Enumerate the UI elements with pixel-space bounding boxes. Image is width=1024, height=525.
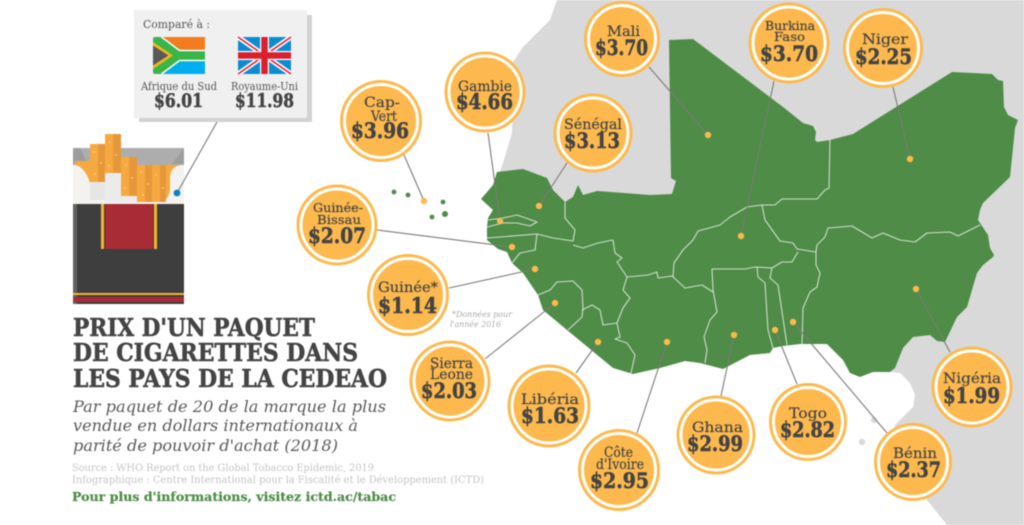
- title: LES PAYS DE LA CEDEAO: [73, 364, 387, 393]
- callout: Gambie: $4.66: [456, 89, 513, 114]
- callout: Niger: [844, 10, 922, 162]
- callout: Libéria: $1.63: [521, 403, 579, 428]
- subtitle: vendue en dollars internationaux à: [73, 417, 358, 435]
- callout: Nigéria: Nigéria: [943, 371, 1001, 387]
- callout: Ghana: $2.99: [687, 431, 743, 456]
- callout: Burkina Faso: $3.70: [760, 41, 818, 66]
- title: DE CIGARETTES DANS: [73, 338, 358, 367]
- footnote: [450, 309, 513, 330]
- callout: Guinée: [368, 256, 538, 334]
- callout: Guinée-Bissau: $2.07: [308, 223, 366, 248]
- callout: Mali: Mali: [607, 24, 641, 40]
- callout: Sénégal: $3.13: [564, 128, 620, 153]
- callout: Sierra Leone: [411, 300, 558, 420]
- callout: Cap-Vert: $3.96: [351, 118, 409, 143]
- callout: Guinée-Bissau: [298, 186, 515, 264]
- South Africa price: Afrique du Sud: [140, 80, 217, 93]
- callout: Cap-Vert: [342, 82, 427, 204]
- UK price: Royaume-Uni: [231, 80, 298, 93]
- callout: Sénégal: Sénégal: [564, 117, 622, 133]
- callout: Bénin: Bénin: [893, 446, 937, 462]
- cigarette pack illustration: [73, 134, 184, 304]
- callout: Burkina Faso: Burkina: [765, 19, 815, 33]
- icon: South Africa flag: [153, 37, 205, 74]
- subtitle: Par paquet de 20 de la marque la plus: [72, 398, 386, 416]
- footnote: l'année 2016: [450, 319, 502, 330]
- callout: Sierra Leone: Leone: [430, 367, 473, 383]
- title: PRIX D'UN PAQUET: [73, 313, 315, 342]
- callout: Côte d'Ivoire: Côte: [604, 445, 633, 461]
- callout: Cap-Vert: Vert: [370, 109, 398, 125]
- footnote: *Données pour: [452, 309, 513, 320]
- islands of Cape Verde: [392, 190, 448, 219]
- callout: Nigéria: [913, 286, 1011, 426]
- callout: Togo: $2.82: [780, 417, 835, 442]
- map: surrounding grey land: [497, 0, 1024, 525]
- UK price: [231, 80, 298, 112]
- source credits: Infographique : Centre International pour la Fiscalité et le Développement (ICTD): [72, 475, 484, 486]
- islands in the Gulf of Guinea: [859, 417, 877, 445]
- South Africa price: $6.01: [154, 90, 203, 112]
- callout: Sierra Leone: $2.03: [421, 378, 477, 403]
- callout: Mali: $3.70: [595, 35, 648, 60]
- callout: Guinée: $1.14: [378, 293, 437, 318]
- icon: UK flag: [238, 37, 291, 74]
- callout: Ghana: Ghana: [692, 420, 743, 436]
- callout: Côte d'Ivoire: $2.95: [590, 468, 649, 493]
- callout: Mali: [586, 2, 711, 138]
- title: [73, 313, 387, 393]
- more information link: Pour plus d'informations, visitez ictd.ac/tabac: [72, 490, 396, 504]
- source credits: [72, 463, 484, 486]
- callout: Gambie: Gambie: [458, 79, 512, 95]
- panel heading: Comparé à :: [143, 18, 210, 31]
- callout: Guinée-Bissau: Bissau: [317, 212, 361, 227]
- callout: Libéria: Libéria: [521, 392, 579, 408]
- callout: Togo: [770, 327, 846, 460]
- callout: Libéria: [509, 339, 601, 446]
- callout: Burkina Faso: Faso: [774, 30, 805, 44]
- panel: comparison: [134, 10, 312, 122]
- callout: Côte d'Ivoire: [580, 339, 670, 510]
- callout: Nigéria: $1.99: [943, 383, 1000, 408]
- subtitle: parité de pouvoir d'achat (2018): [73, 437, 338, 455]
- map: ECOWAS countries in green: [481, 39, 1018, 377]
- callout: Côte d'Ivoire: d'Ivoire: [596, 457, 644, 473]
- callout: Cap-Vert: Cap-: [364, 95, 400, 111]
- callout: Bénin: $2.37: [886, 457, 941, 482]
- source credits: Source : WHO Report on the Global Tobacco Epidemic, 2019: [72, 463, 374, 474]
- callout: Niger: Niger: [862, 32, 909, 48]
- callout: Sierra Leone: Sierra: [430, 356, 473, 372]
- callout: Guinée-Bissau: Guinée-: [313, 200, 363, 215]
- subtitle: [72, 398, 386, 455]
- callout: Niger: $2.25: [855, 44, 912, 69]
- callout: Guinée: Guinée*: [378, 280, 438, 296]
- South Africa price: [140, 80, 217, 112]
- blue marker on pack: [174, 190, 180, 196]
- callout: Bénin: [790, 319, 950, 500]
- callout: Togo: Togo: [789, 406, 827, 422]
- leader from pack to comparison box: [177, 122, 217, 193]
- callout: Ghana: [678, 332, 754, 473]
- callout: Gambie: [446, 53, 524, 224]
- callout: Sénégal: [536, 95, 631, 209]
- UK price: $11.98: [235, 90, 294, 112]
- callout: Burkina Faso: [738, 4, 828, 239]
